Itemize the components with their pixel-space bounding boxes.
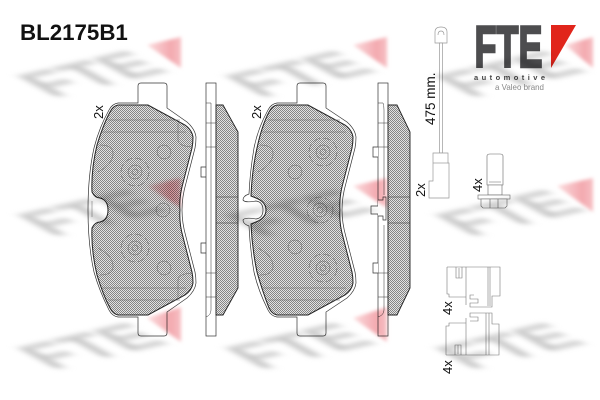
side view quantity label: 2x [413, 183, 428, 197]
side 2 details [378, 103, 410, 317]
brake pad 2 side view [371, 83, 410, 336]
bolt shaft [487, 154, 503, 185]
bolt quantity label: 4x [470, 178, 485, 192]
watermark row 2: FTE [211, 183, 389, 244]
bolt head [481, 199, 507, 208]
title: BL2175B1 [20, 20, 128, 45]
logo red triangle [551, 25, 576, 68]
pad 1 hidden contour lines [92, 120, 192, 300]
pad 1 quantity label: 2x [91, 105, 106, 119]
pad 1 backing plate [88, 83, 196, 336]
pad 1 friction surface [92, 105, 193, 315]
bolt neck [488, 182, 502, 195]
watermark row 3: FTE [211, 316, 389, 377]
watermark row 1: FTE [421, 44, 599, 105]
watermark row 3: FTE [421, 316, 599, 377]
side 1 details [206, 103, 238, 317]
watermark row 1: FTE [3, 44, 181, 105]
sensor cap [435, 27, 447, 43]
logo wordmark: FTE [474, 15, 542, 80]
watermark row 3 [3, 307, 599, 377]
side 2 friction block [388, 105, 410, 315]
watermark row 3: FTE [3, 316, 181, 377]
pad 2 quantity label: 2x [249, 105, 264, 119]
pad 2 friction surface [251, 105, 353, 315]
wear sensor [429, 27, 449, 198]
brake pad 1 side view [201, 83, 238, 336]
logo Valeo line: a Valeo brand [495, 82, 544, 92]
watermark row 1: FTE [211, 44, 389, 105]
watermark row 1 [3, 37, 599, 105]
watermark row 2: FTE [3, 183, 181, 244]
brake pad 1 front view [88, 83, 196, 336]
side 1 plate [206, 83, 216, 336]
sensor connector [429, 153, 449, 198]
sensor wire [440, 43, 442, 153]
clip quantity label upper: 4x [440, 301, 455, 315]
brake pad 2 front view [243, 83, 356, 336]
pad 2 hidden contour lines [258, 120, 346, 300]
retaining clip upper [447, 267, 500, 307]
side 2 plate [378, 83, 388, 336]
logo automotive line: automotive [474, 73, 545, 82]
bolt flange [478, 195, 510, 199]
mounting bolt [478, 154, 510, 208]
watermark row 2: FTE [421, 183, 599, 244]
clip quantity label lower: 4x [440, 360, 455, 374]
side 1 friction block [216, 105, 238, 315]
FTE logo [474, 15, 576, 92]
retaining clip lower [446, 313, 499, 355]
wire length label: 475 mm. [423, 72, 438, 125]
watermark row 2 [3, 178, 599, 244]
pad 2 backing plate [243, 83, 356, 336]
